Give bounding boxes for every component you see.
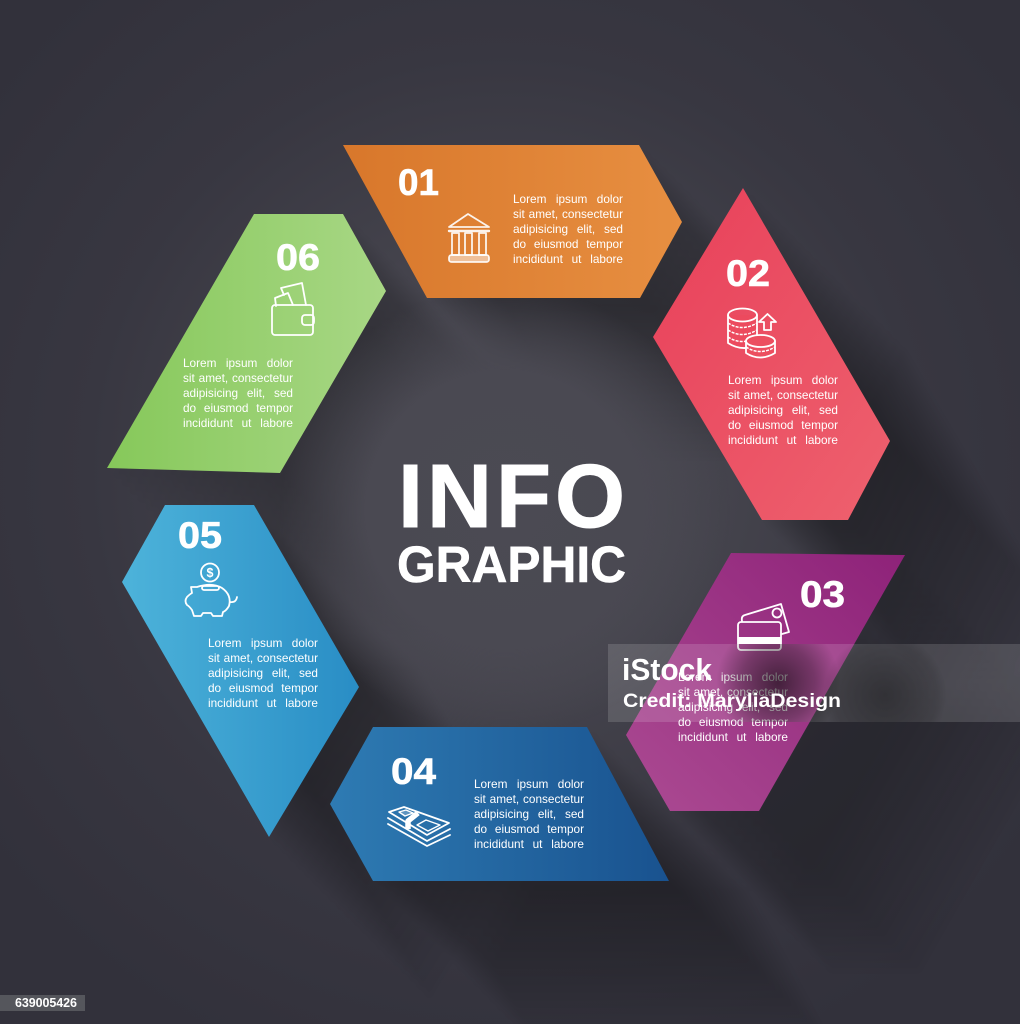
text block 02: adipisicing elit, sed: [728, 403, 838, 417]
text block 04: adipisicing elit, sed: [474, 807, 584, 821]
text block 05: [208, 636, 320, 712]
watermark band: iStock: [622, 652, 713, 687]
text block 06: adipisicing elit, sed: [183, 386, 293, 400]
long shadows: [115, 153, 1020, 1024]
text block 05: incididunt ut labore: [208, 696, 318, 710]
panel 03: 03: [800, 574, 845, 615]
icon: bank: [449, 214, 489, 262]
text block 02: Lorem ipsum dolor: [728, 373, 838, 387]
icon: banknotes stack: [388, 807, 450, 846]
panel 01: [343, 145, 682, 298]
image id tag: 639005426: [15, 996, 77, 1010]
panel 03: [626, 553, 905, 811]
text block 04: Lorem ipsum dolor: [474, 777, 584, 791]
text block 06: do eiusmod tempor: [183, 401, 293, 415]
text block 03: incididunt ut labore: [678, 730, 788, 744]
text block 06: [183, 356, 295, 432]
text block 04: [474, 777, 586, 853]
watermark band: [608, 644, 1020, 722]
title: GRAPHIC: [397, 536, 626, 593]
text block 02: [728, 373, 840, 449]
title: [397, 447, 626, 593]
text block 01: incididunt ut labore: [513, 252, 623, 266]
text block 01: do eiusmod tempor: [513, 237, 623, 251]
icon: piggy bank: $: [207, 566, 214, 580]
text block 04: incididunt ut labore: [474, 837, 584, 851]
text block 05: adipisicing elit, sed: [208, 666, 318, 680]
text block 03: do eiusmod tempor: [678, 715, 788, 729]
panel 02: [653, 188, 890, 520]
text block 02: incididunt ut labore: [728, 433, 838, 447]
text block 02: sit amet, consectetur: [728, 388, 838, 402]
text block 05: sit amet, consectetur: [208, 651, 318, 665]
text block 01: adipisicing elit, sed: [513, 222, 623, 236]
text block 06: Lorem ipsum dolor: [183, 356, 293, 370]
text block 05: Lorem ipsum dolor: [208, 636, 318, 650]
watermark band: Credit: MaryliaDesign: [623, 691, 841, 712]
panel 04: [330, 727, 669, 881]
panel 06: [107, 214, 386, 473]
panel 04: 04: [391, 751, 436, 792]
image id tag: [0, 995, 85, 1011]
panel 05: 05: [178, 515, 222, 556]
title: INFO: [398, 447, 625, 547]
icon: coins with arrow: [728, 308, 776, 358]
text block 04: sit amet, consectetur: [474, 792, 584, 806]
panel 01: 01: [398, 162, 439, 203]
text block 06: sit amet, consectetur: [183, 371, 293, 385]
text block 03: Lorem ipsum dolor: [678, 670, 788, 684]
text block 05: do eiusmod tempor: [208, 681, 318, 695]
text block 04: do eiusmod tempor: [474, 822, 584, 836]
text block 01: [513, 192, 625, 268]
text block 03: adipisicing elit, sed: [678, 700, 788, 714]
icon: credit cards: [738, 604, 789, 650]
text block 01: sit amet, consectetur: [513, 207, 623, 221]
text block 03: sit amet, consectetur: [678, 685, 788, 699]
text block 02: do eiusmod tempor: [728, 418, 838, 432]
icon: wallet: [272, 283, 314, 335]
text block 06: incididunt ut labore: [183, 416, 293, 430]
text block 01: Lorem ipsum dolor: [513, 192, 623, 206]
panel 05: [122, 505, 359, 837]
icon: piggy bank: [186, 564, 237, 616]
centre glow: [280, 285, 730, 735]
panel 06: 06: [276, 237, 320, 278]
panel 02: 02: [726, 253, 770, 294]
text block 03: [678, 670, 790, 746]
